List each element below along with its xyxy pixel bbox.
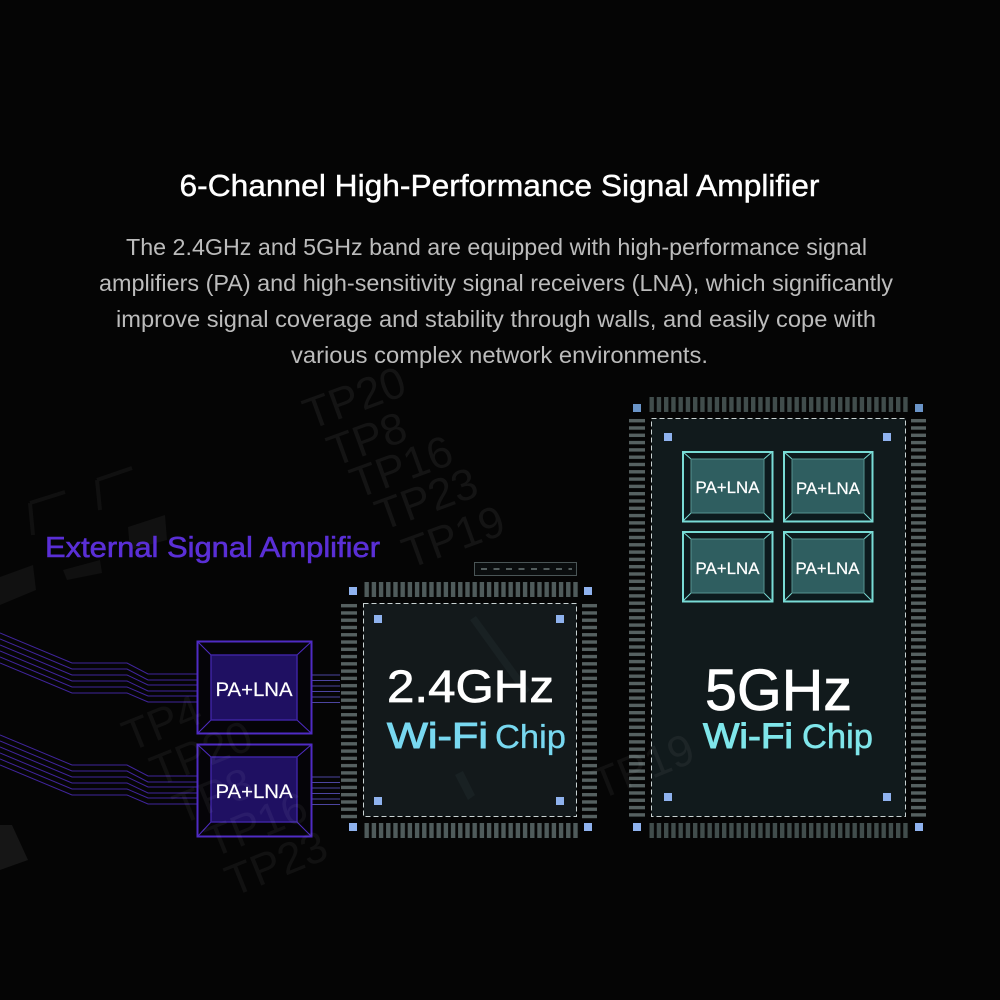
signal traces: upper amplifier [0, 633, 340, 702]
title: 6-Channel High-Performance Signal Amplifier [180, 168, 820, 203]
body text: The 2.4GHz and 5GHz band are equipped with high-performance signal [126, 234, 867, 260]
internal PA+LNA top left [683, 452, 772, 522]
signal traces: lower amplifier [0, 735, 340, 804]
faint TP watermark labels over modules: TP20 [143, 711, 259, 796]
external PA+LNA module 1 [198, 642, 312, 734]
internal PA+LNA bottom right [784, 532, 872, 602]
body text: improve signal coverage and stability through walls, and easily cope with [116, 306, 876, 332]
body text [99, 234, 893, 368]
small connector above 2.4GHz chip [474, 562, 576, 576]
external PA+LNA module 1: PA+LNA [216, 680, 293, 701]
external PA+LNA module 2: PA+LNA [216, 782, 293, 803]
internal PA+LNA bottom right: PA+LNA [796, 560, 860, 578]
faint circuit board background: TP16 [344, 426, 459, 508]
faint circuit board background: TP8 [321, 403, 413, 476]
5GHz chip: Wi-Fi [703, 717, 793, 756]
5GHz chip: Chip [802, 718, 873, 756]
internal PA+LNA top right [784, 452, 872, 522]
faint circuit board background: TP23 [369, 458, 484, 540]
2.4GHz chip: 2.4GHz [387, 661, 554, 712]
2.4GHz chip: Wi-Fi [387, 715, 488, 756]
5GHz chip [629, 397, 926, 838]
2.4GHz chip [341, 582, 597, 838]
external amplifier heading: External Signal Amplifier [45, 532, 380, 564]
faint circuit board background [0, 357, 511, 870]
faint circuit board background: TP19 [396, 496, 511, 578]
faint TP watermark labels over modules [115, 686, 701, 906]
internal PA+LNA top left: PA+LNA [696, 479, 760, 497]
5GHz chip: 5GHz [705, 658, 852, 723]
faint TP watermark labels over modules: TP8 [166, 759, 260, 834]
external PA+LNA module 2 [198, 744, 312, 836]
faint TP watermark labels over modules: TP4 [115, 686, 209, 761]
faint TP watermark labels over modules: TP23 [218, 821, 334, 906]
faint TP watermark labels over modules: TP19 [585, 724, 701, 809]
internal PA+LNA top right: PA+LNA [796, 480, 860, 498]
faint circuit board background: TP20 [297, 357, 412, 439]
body text: various complex network environments. [291, 342, 708, 368]
2.4GHz chip: Chip [495, 718, 566, 755]
faint TP watermark labels over modules: TP16 [198, 782, 314, 867]
internal PA+LNA bottom left [683, 532, 772, 602]
internal PA+LNA bottom left: PA+LNA [696, 560, 760, 578]
body text: amplifiers (PA) and high-sensitivity signal receivers (LNA), which significantly [99, 270, 893, 296]
